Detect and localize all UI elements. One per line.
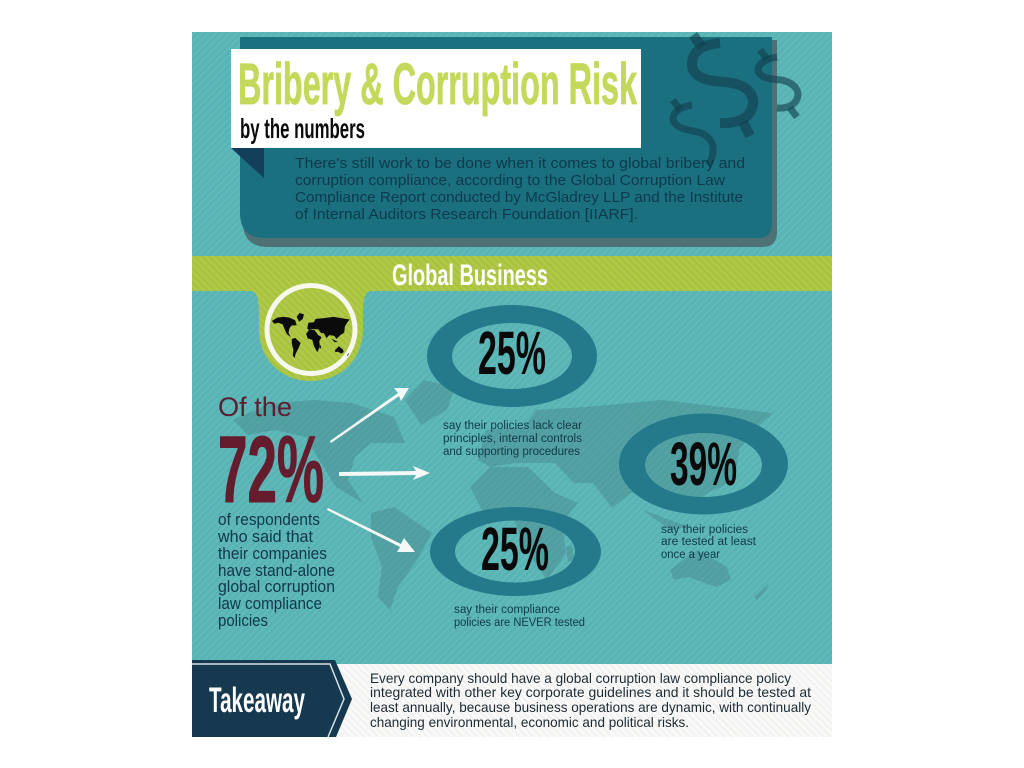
description: law compliance <box>218 595 322 613</box>
panel shadow <box>243 40 777 247</box>
arrows <box>327 388 430 552</box>
caption: say their compliance <box>454 604 560 616</box>
description: who said that <box>217 528 313 546</box>
arrow: upper <box>330 388 409 443</box>
caption: policies are NEVER tested <box>454 617 585 629</box>
stat lead: 72% <box>217 392 335 630</box>
takeaway text: integrated with other key corporate guidelines and it should be tested at <box>370 684 811 700</box>
ring <box>430 507 601 596</box>
takeaway text: changing environmental, economic and political risks. <box>370 714 689 730</box>
panel body <box>240 37 772 238</box>
subtitle: by the numbers <box>240 113 365 144</box>
ribbon fold <box>231 148 264 178</box>
world map backdrop <box>233 380 773 610</box>
intro text: Compliance Report conducted by McGladrey LLP and the Institute <box>295 190 743 206</box>
description: have stand-alone <box>218 562 335 580</box>
section heading: Global Business <box>392 259 548 292</box>
intro text: of Internal Auditors Research Foundation [IIARF]. <box>295 207 638 223</box>
caption: principles, internal controls <box>443 433 582 445</box>
stat: 25% lack clear principles <box>427 305 597 458</box>
description: of respondents <box>218 511 320 529</box>
intro text <box>295 156 745 223</box>
big number: 72% <box>218 417 324 523</box>
caption: once a year <box>661 549 720 561</box>
value: 39% <box>670 430 737 498</box>
description: their companies <box>218 545 327 563</box>
description: policies <box>218 612 268 630</box>
section band: global business <box>192 256 832 381</box>
description <box>217 511 335 630</box>
arrow: middle <box>339 466 430 480</box>
takeaway text: Every company should have a global corruption law compliance policy <box>370 670 791 686</box>
value: 25% <box>481 515 549 583</box>
icon: dollar signs <box>673 35 798 165</box>
caption <box>454 604 585 629</box>
caption <box>443 420 582 458</box>
intro text: corruption compliance, according to the Global Corruption Law <box>295 173 726 189</box>
stat: 39% tested yearly <box>619 414 788 561</box>
intro text: There's still work to be done when it comes to global bribery and <box>295 156 745 172</box>
takeaway text <box>370 670 811 730</box>
title box <box>231 49 641 148</box>
panel: intro <box>231 35 798 247</box>
takeaway badge <box>192 660 352 737</box>
takeaway strip <box>192 660 832 737</box>
caption: say their policies lack clear <box>443 420 582 432</box>
caption: and supporting procedures <box>443 446 580 458</box>
caption: say their policies <box>661 524 748 536</box>
value: 25% <box>478 319 546 387</box>
badge label: Takeaway <box>209 681 305 720</box>
arrow: lower <box>327 508 415 552</box>
of the: Of the <box>218 392 292 422</box>
icon: globe <box>267 286 355 374</box>
takeaway text: least annually, because business operations are dynamic, with continually <box>370 699 811 715</box>
description: global corruption <box>218 578 335 596</box>
background panel <box>192 32 832 664</box>
ring <box>619 414 788 514</box>
caption: are tested at least <box>661 536 757 548</box>
ring <box>427 305 597 407</box>
title: Bribery & Corruption Risk <box>238 52 637 117</box>
caption <box>661 524 757 561</box>
stat: 25% never tested <box>430 507 601 629</box>
